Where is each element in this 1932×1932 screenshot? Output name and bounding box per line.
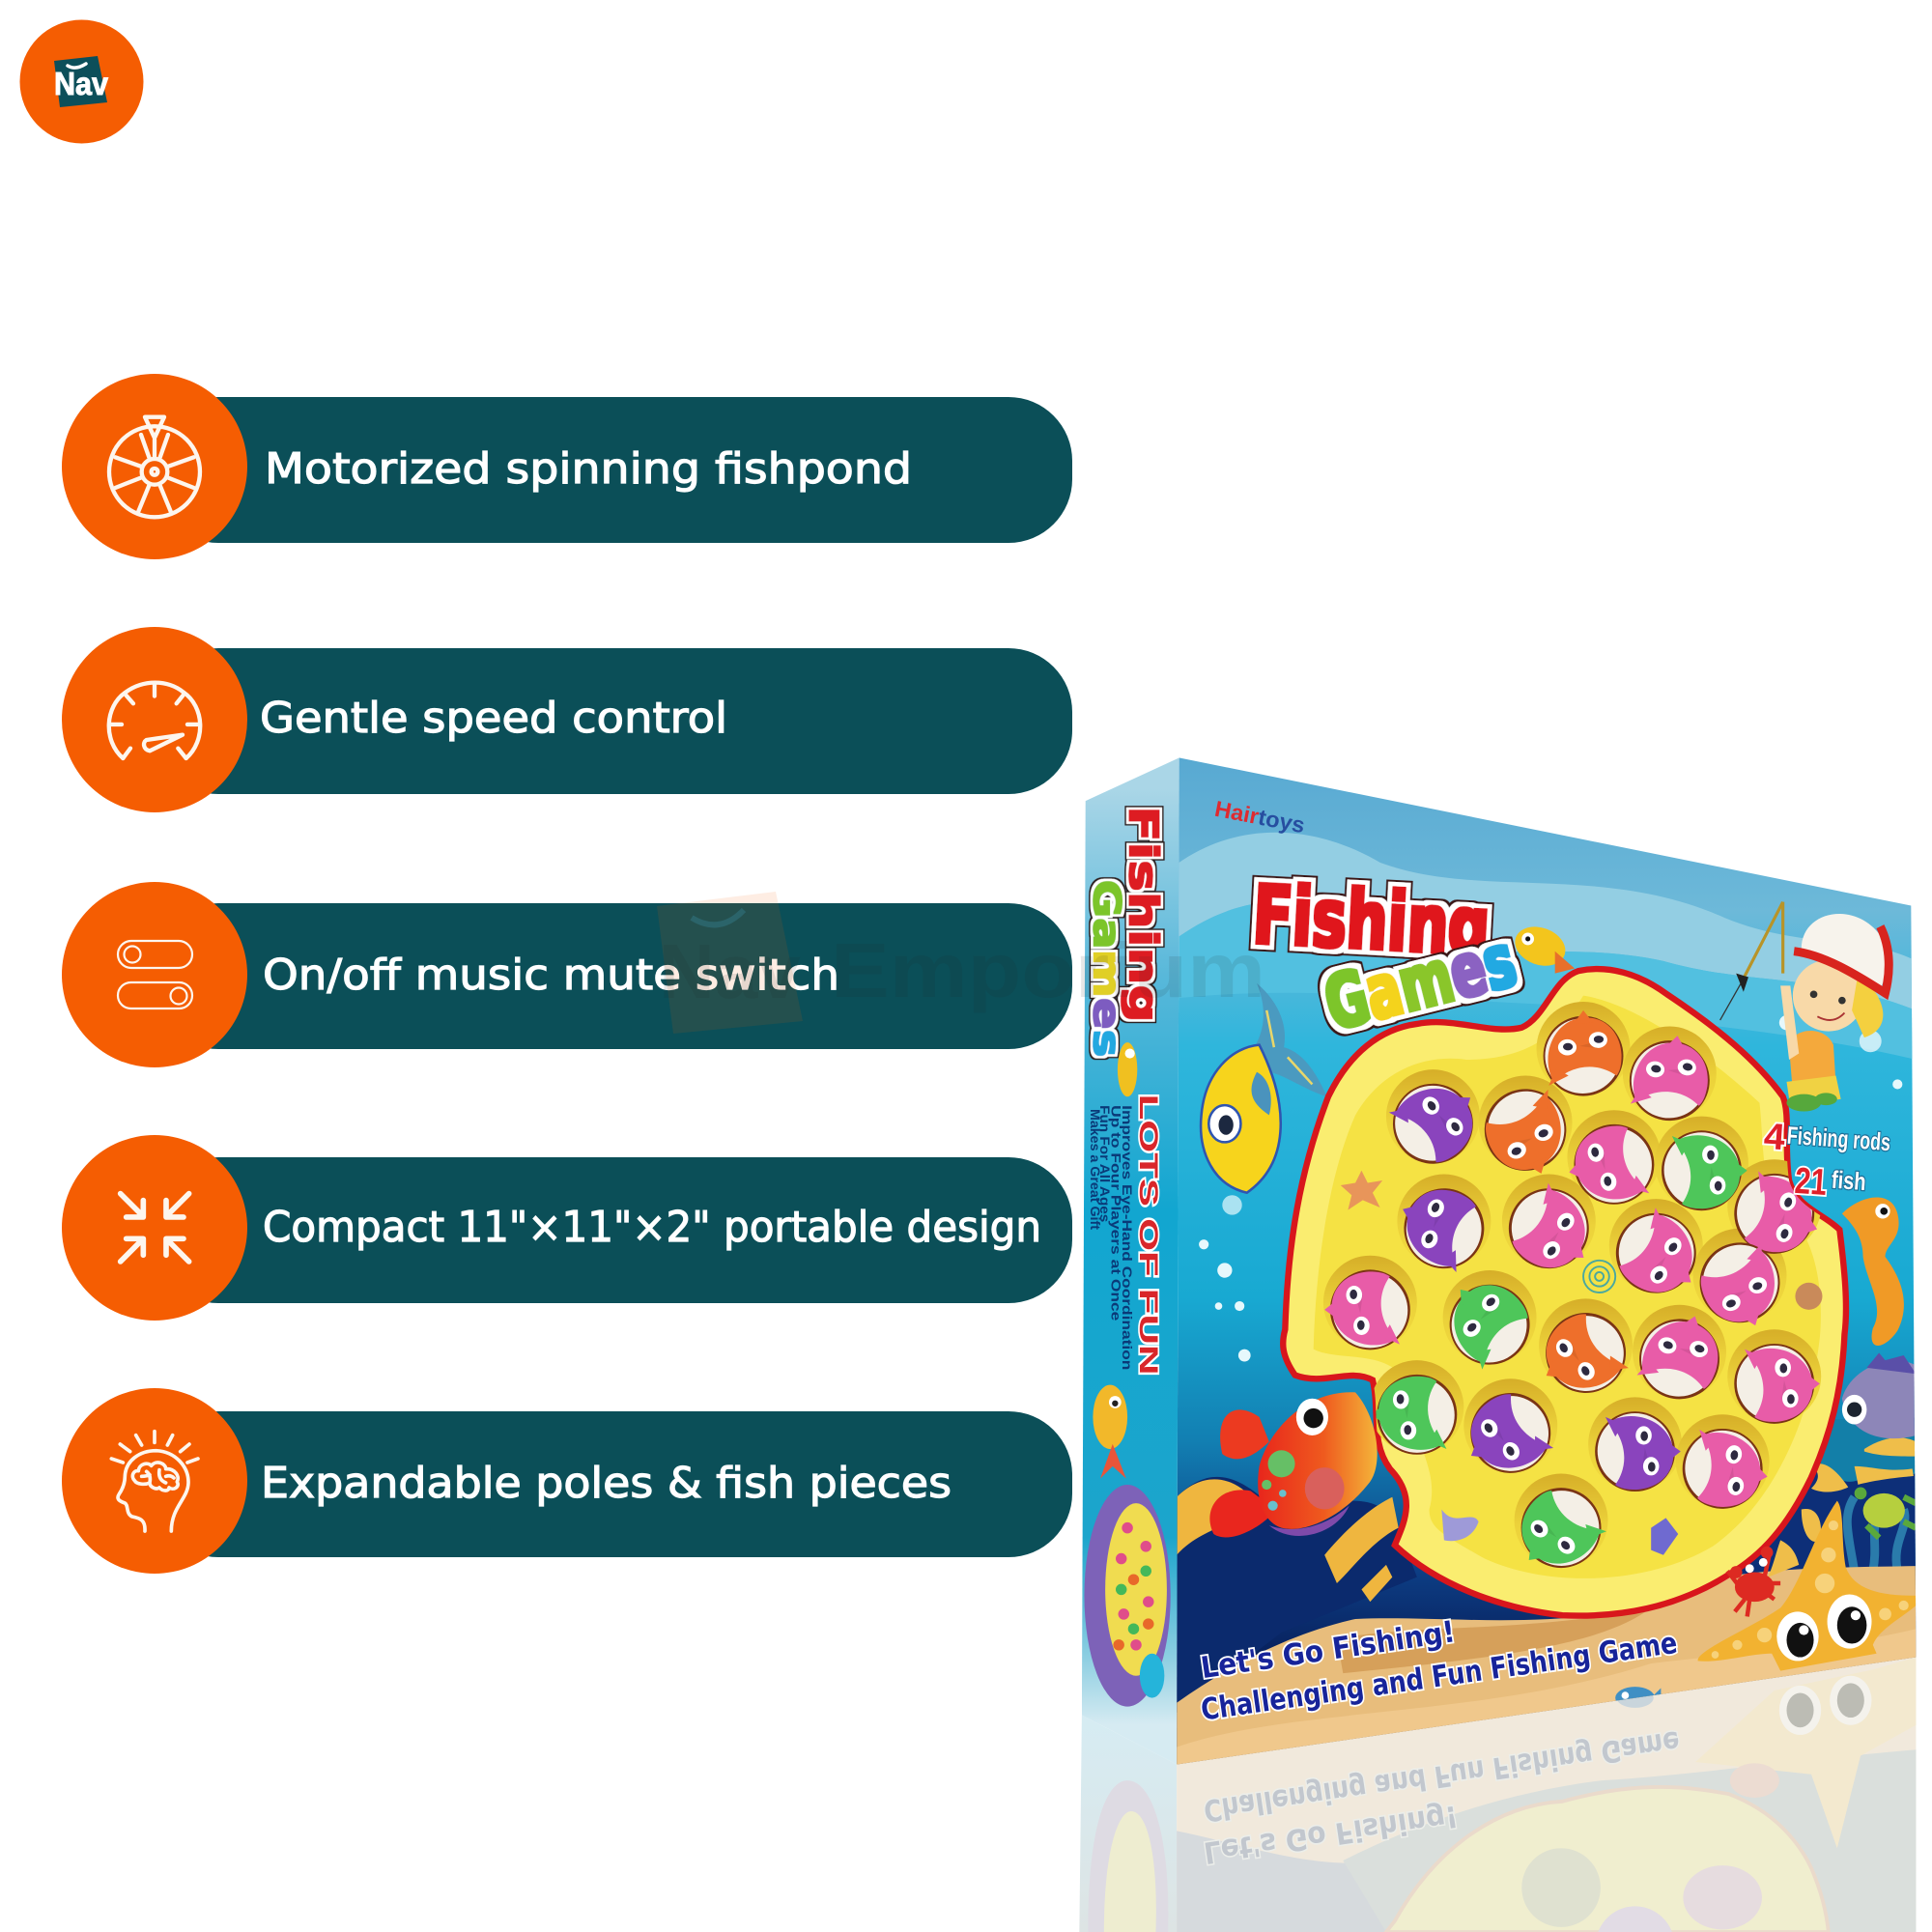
- callout: 4 fishing rods, 21 fish: 4: [1763, 1116, 1787, 1158]
- logo: Nav badge: Nav: [54, 66, 109, 101]
- fish wells: [1323, 1002, 1821, 1567]
- seahorse: [1842, 1198, 1904, 1346]
- boy with fishing rod: [1720, 902, 1889, 1112]
- watermark: Nav Emporium: Nav: [659, 928, 801, 1014]
- sand seabed: [1177, 1566, 1916, 1775]
- slogan: Challenging and Fun Fishing Game: [1199, 1627, 1680, 1728]
- side feature list: [1091, 1106, 1132, 1370]
- box front face: [1171, 752, 1922, 1775]
- yellow cartoon fish: [1201, 983, 1327, 1193]
- callout: 4 fishing rods, 21 fish: fish: [1831, 1167, 1867, 1196]
- board stickers: [1341, 1171, 1822, 1555]
- icon: speedometer: [109, 683, 200, 758]
- callout: 4 fishing rods, 21 fish: [1762, 1122, 1891, 1197]
- watermark: Nav Emporium: Emporium: [831, 927, 1265, 1013]
- label: motorized spinning fishpond: Motorized spinning fishpond: [265, 444, 912, 494]
- small yellow fish near title: [1515, 926, 1575, 974]
- callout: 4 fishing rods, 21 fish: 21: [1794, 1160, 1829, 1204]
- purple fish: [1842, 1353, 1916, 1438]
- small blue fish: [1615, 1687, 1661, 1709]
- slogan: Let's Go Fishing!: [1199, 1615, 1458, 1686]
- feature row: compact portable design: [62, 1135, 1072, 1321]
- side feature list: Up to Four Players at Once: [1109, 1105, 1123, 1321]
- fish pieces: [1324, 1010, 1831, 1588]
- feature row: motorized spinning fishpond: [62, 374, 1072, 559]
- feature row: expandable poles and fish pieces: [62, 1388, 1072, 1574]
- icon: head with brain: [111, 1432, 198, 1531]
- label: expandable poles and fish pieces: Expandable poles & fish pieces: [261, 1459, 952, 1508]
- waves: [1179, 833, 1916, 1060]
- side feature list: Improves Eye-Hand Coordination: [1120, 1105, 1134, 1370]
- feature row: gentle speed control: [62, 627, 1072, 812]
- side small fish: [1093, 1042, 1137, 1479]
- game title: Fishing: Fishing: [1251, 867, 1492, 975]
- left reef coral: [1177, 1477, 1417, 1713]
- label: music mute switch: On/off music mute switch: [263, 951, 839, 1000]
- game title: Games: Games: [1317, 918, 1524, 1048]
- icon: compress arrows: [121, 1194, 189, 1262]
- label: gentle speed control: Gentle speed control: [260, 694, 727, 743]
- side heading: lots of fun: LOTS OF FUN: [1134, 1094, 1163, 1375]
- reflected slogan: Let's Go Fishing!: [1202, 1798, 1460, 1869]
- product box: fishing game packaging: [1072, 752, 1922, 1932]
- crab: [1727, 1547, 1780, 1616]
- watermark: Nav Emporium: [657, 892, 1265, 1034]
- callout: 4 fishing rods, 21 fish: Fishing rods: [1786, 1122, 1891, 1156]
- game board tray: [1283, 969, 1846, 1616]
- box reflection on the floor: [1079, 1658, 1916, 1932]
- side miniature game board: [1084, 1485, 1171, 1707]
- turtle: [1855, 1488, 1916, 1538]
- side feature list: Fun For All Ages: [1097, 1105, 1112, 1222]
- right reef background: [1742, 1418, 1916, 1580]
- reflected slogan: [1202, 1723, 1682, 1869]
- bubbles: [1199, 1015, 1902, 1423]
- side feature list: Makes a Great Gift: [1088, 1109, 1102, 1231]
- icon: toggle switches: [118, 941, 192, 1009]
- logo: Nav badge: [19, 19, 143, 143]
- side title: Fishing: Fishing: [1121, 806, 1167, 1023]
- icon: prize wheel: [109, 417, 200, 517]
- box side face: [1082, 757, 1179, 1764]
- red cartoon fish: [1209, 1392, 1378, 1537]
- label: compact portable design: Compact 11"×11"×2" portable design: [263, 1203, 1041, 1252]
- reflected slogan: Challenging and Fun Fishing Game: [1202, 1723, 1682, 1828]
- side title: Games: Ga m e s: [1085, 880, 1128, 1057]
- right reef yellow coral: [1768, 1437, 1916, 1577]
- brand: hairtoys: Hairtoys: [1212, 796, 1307, 838]
- starfish: [1698, 1501, 1916, 1671]
- feature row: music mute switch: [62, 882, 1072, 1067]
- reflected starfish and eyes: [1616, 1658, 1916, 1848]
